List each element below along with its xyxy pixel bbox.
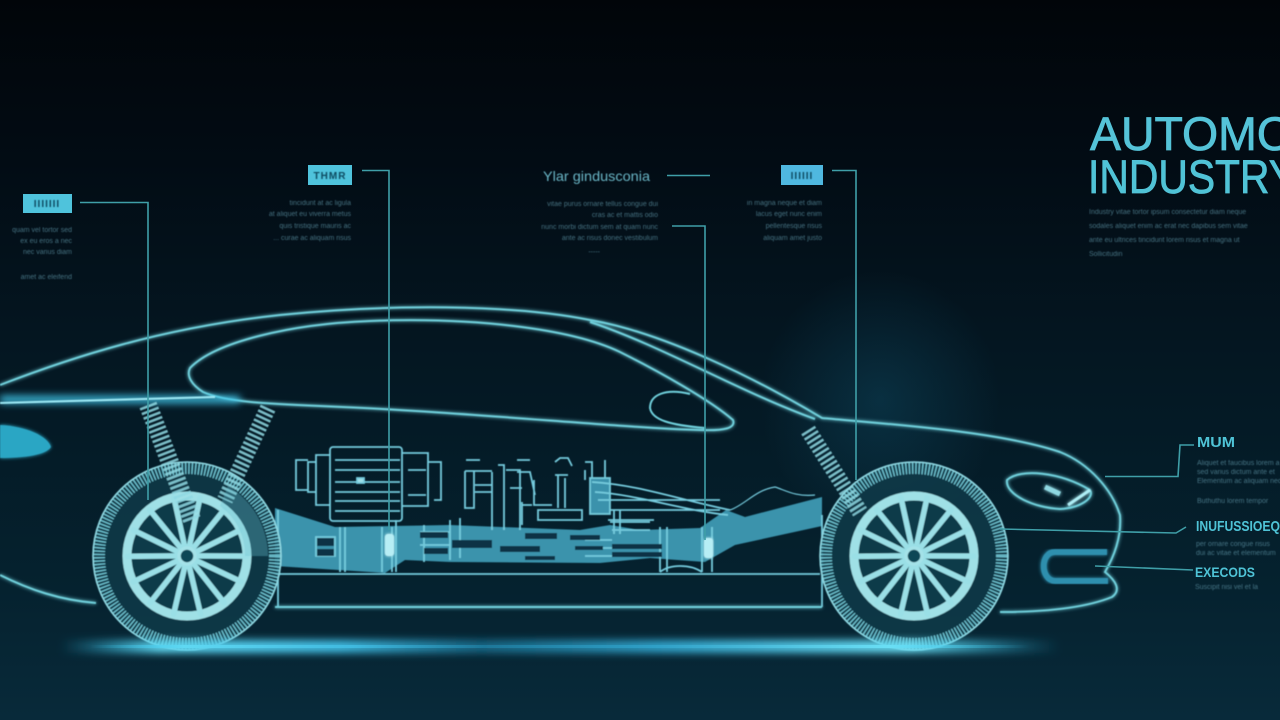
car body outline bbox=[0, 307, 1120, 612]
front wheel bbox=[820, 462, 1008, 650]
callout: left tag: IIIIIII bbox=[34, 199, 60, 210]
callout: right lower: EXECODS bbox=[1195, 564, 1255, 580]
mirror bbox=[650, 392, 705, 428]
callout: third tag: lacus eget nunc enim bbox=[756, 211, 822, 218]
title description bbox=[1089, 209, 1248, 258]
callout: right lower bbox=[1095, 564, 1258, 591]
callout: third tag: in magna neque et diam bbox=[747, 200, 822, 207]
callout: third tag: pellentesque risus bbox=[766, 223, 822, 230]
title description: Sollicitudin bbox=[1089, 251, 1123, 258]
chassis detail bbox=[316, 518, 712, 572]
background glow behind the windshield bbox=[760, 270, 1000, 530]
front grille bbox=[1044, 552, 1108, 581]
rear suspension spring right bbox=[225, 408, 268, 500]
callout: left tag bbox=[12, 194, 148, 500]
rear wheel bbox=[93, 462, 281, 650]
callout: middle heading: Ylar gindusconia bbox=[543, 168, 650, 184]
callout: middle heading: ante ac risus donec vestibulum bbox=[562, 235, 658, 242]
callout: second tag: THMR bbox=[314, 171, 346, 182]
title description: sodales aliquet enim ac erat nec dapibus sem vitae bbox=[1089, 223, 1248, 230]
dark machined blocks in chassis bbox=[317, 532, 662, 560]
drive shaft bundle bbox=[592, 482, 815, 534]
callout: second tag: ... curae ac aliquam risus bbox=[273, 235, 351, 242]
car illustration bbox=[0, 307, 1120, 650]
engine block bbox=[296, 447, 441, 521]
callout: second tag: at aliquet eu viverra metus bbox=[269, 211, 351, 218]
callout: third tag bbox=[747, 165, 856, 480]
rear light bbox=[0, 425, 51, 458]
callout: middle heading: nunc morbi dictum sem at quam nunc bbox=[541, 224, 658, 231]
callout: third tag: aliquam amet justo bbox=[763, 235, 822, 242]
beltline glow bbox=[0, 396, 240, 403]
callout: right upper: Elementum ac aliquam nec bbox=[1197, 478, 1280, 485]
title description: Industry vitae tortor ipsum consectetur diam neque bbox=[1089, 209, 1246, 216]
callout: right middle bbox=[1000, 518, 1280, 557]
callout: right upper: sed varius dictum ante et bbox=[1197, 469, 1275, 476]
callout: right lower: Suscipit nisi vel et la bbox=[1195, 584, 1258, 591]
callout: second tag: tincidunt at ac ligula bbox=[290, 200, 351, 207]
callout: right upper: Buthuthu lorem tempor bbox=[1197, 498, 1269, 505]
gearbox bbox=[465, 458, 610, 530]
callout: second tag: quis tristique mauris ac bbox=[279, 223, 351, 230]
callout: right middle: per ornare congue risus bbox=[1196, 541, 1270, 548]
callout: middle heading: ----- bbox=[588, 249, 601, 256]
side window outline bbox=[189, 320, 733, 430]
callout: second tag bbox=[269, 165, 389, 530]
callout: middle heading: cras ac et mattis odio bbox=[592, 212, 658, 219]
callout: right upper: Aliquet et faucibus lorem a bbox=[1197, 460, 1280, 467]
callout: right upper: MUM bbox=[1197, 434, 1235, 451]
callout: left tag: ex eu eros a nec bbox=[20, 238, 72, 245]
translucent rear tyre wall bbox=[220, 486, 268, 556]
rear suspension spring left bbox=[148, 405, 192, 520]
glowing bearing left bbox=[385, 534, 394, 556]
title bbox=[1088, 107, 1280, 203]
callout: third tag: IIIIII bbox=[791, 171, 813, 182]
front suspension spring bbox=[808, 430, 860, 512]
chassis bbox=[275, 497, 822, 573]
callout: left tag: amet ac eleifend bbox=[21, 274, 72, 281]
floor light streak bbox=[60, 640, 1060, 653]
callout: left tag: quam vel tortor sed bbox=[12, 227, 72, 234]
callout: right upper bbox=[1105, 434, 1280, 505]
title description: ante eu ultrices tincidunt lorem risus et magna ut bbox=[1089, 237, 1240, 244]
callout: left tag: nec varius diam bbox=[23, 249, 72, 256]
callout: middle heading bbox=[541, 168, 710, 540]
callout: middle heading: vitae purus ornare tellus congue dui bbox=[547, 201, 658, 208]
glowing bearing right bbox=[704, 538, 713, 558]
callout: right middle: dui ac vitae et elementum bbox=[1196, 550, 1276, 557]
headlight bbox=[1007, 473, 1091, 509]
lower frame bbox=[275, 510, 822, 607]
